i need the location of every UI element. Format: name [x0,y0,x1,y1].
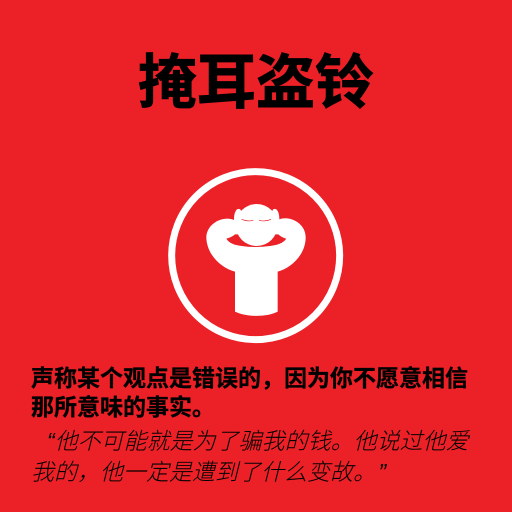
gap under the chin [226,234,286,247]
figure silhouette [206,204,306,316]
text: 那所意味的事实。 [31,394,215,420]
closed eyes [242,219,271,221]
text: 我的，他一定是遭到了什么变故。 ” [31,459,386,485]
icon: person covering ears inside a ring [168,168,344,344]
text: “他不可能就是为了骗我的钱。他说过他爱 [47,428,469,454]
description text [31,365,470,485]
title: 掩耳盗铃 [138,50,374,116]
head [236,204,278,246]
text: 声称某个观点是错误的，因为你不愿意相信 [31,365,468,391]
icon ring [172,172,340,340]
